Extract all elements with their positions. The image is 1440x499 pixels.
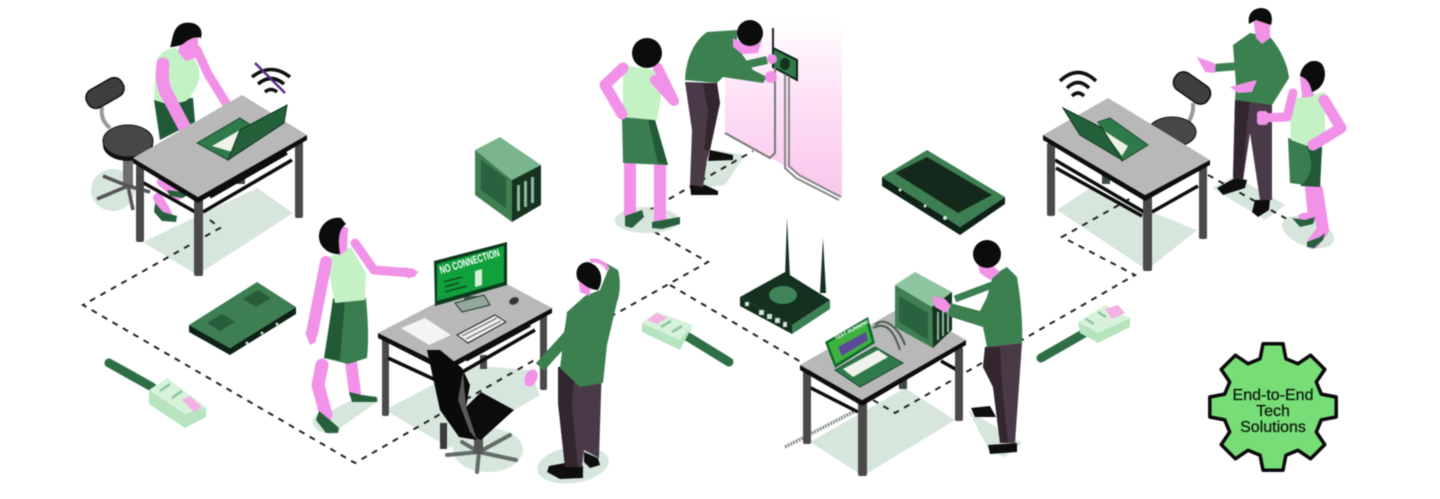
router — [740, 218, 830, 334]
laptop: test running — [825, 317, 903, 387]
badge: end-to-end tech solutions gear — [1210, 344, 1336, 470]
office chair: black — [427, 350, 516, 472]
rack device: left — [189, 282, 296, 355]
screen text: NO CONNECTION — [438, 247, 501, 277]
person: woman with hand on chin — [605, 38, 680, 233]
network plug: centre — [642, 312, 729, 362]
gear label: Tech — [1256, 403, 1290, 420]
network plug: bottom left — [109, 363, 206, 428]
person: man fixing wall box — [685, 20, 777, 195]
gear shape — [1210, 344, 1336, 470]
laptop: top left — [197, 105, 287, 160]
laptop: test running: TEST RUNNING — [834, 319, 870, 342]
stool chair — [83, 74, 153, 210]
desk: laptop and server — [785, 305, 966, 476]
floor shadows — [91, 150, 1338, 488]
monitor: no connection — [434, 242, 507, 312]
desk: top left — [133, 95, 307, 276]
person: man gesturing — [1197, 8, 1289, 217]
wall box — [773, 48, 797, 80]
paper — [401, 318, 451, 345]
person: man scratching head — [522, 261, 620, 479]
laptop: top right — [1063, 108, 1148, 161]
rack device: right — [882, 150, 1005, 235]
person: man at server — [932, 240, 1022, 454]
network plug: right — [1041, 305, 1130, 358]
gear label: End-to-End — [1233, 387, 1313, 404]
server tower: centre top — [475, 137, 541, 222]
desk: no connection — [378, 275, 552, 416]
desk: top right — [1043, 98, 1210, 271]
gear label: Solutions — [1240, 419, 1306, 436]
network dashed lines — [83, 151, 1312, 463]
icon: wifi — [1060, 72, 1096, 96]
pink wall — [725, 20, 842, 200]
person: woman leaning on laptop desk — [154, 23, 226, 222]
keyboard and mouse — [457, 296, 520, 343]
person: woman with thumbs up — [1257, 61, 1341, 254]
icon: crossed-out wifi — [252, 63, 290, 93]
person: woman pointing — [305, 218, 419, 433]
server tower: on desk — [895, 272, 952, 348]
chair: right desk — [1148, 68, 1214, 147]
